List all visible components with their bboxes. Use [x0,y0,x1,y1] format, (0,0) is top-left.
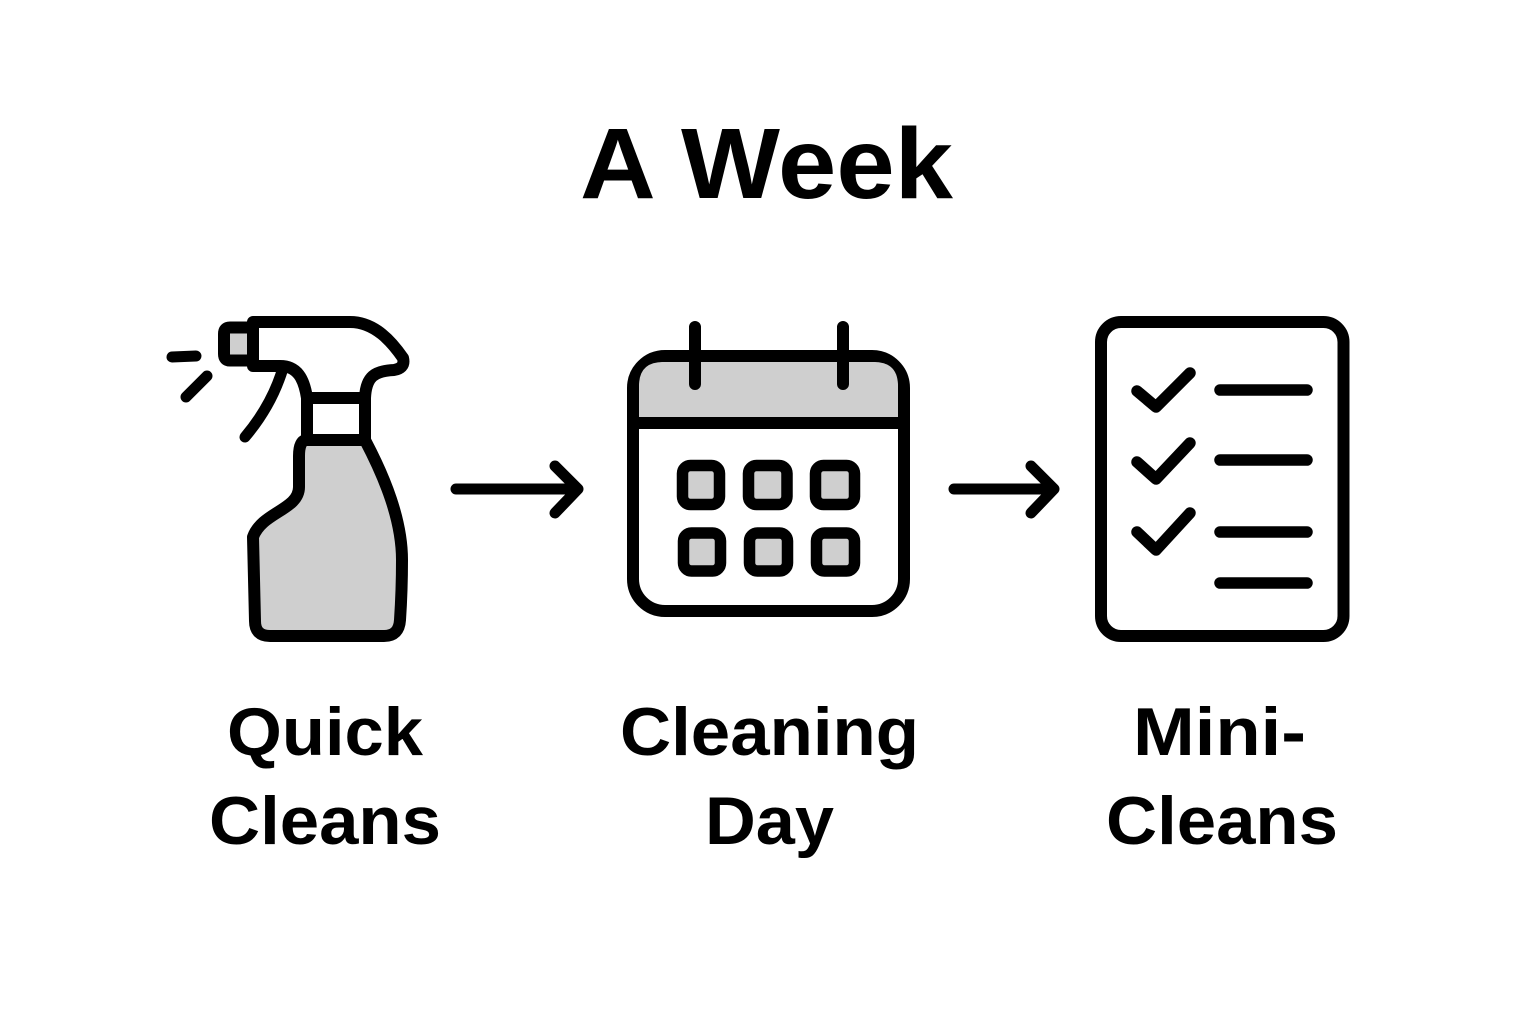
label: Mini-Cleans [1106,694,1338,859]
spray marks [172,356,207,397]
header divider [633,417,904,429]
label: Quick Cleans: Cleans [209,783,441,859]
label: Quick Cleans [209,694,441,859]
arrow: calendar to checklist [954,466,1054,513]
checklist page [1101,322,1344,636]
label: Cleaning Day: Cleaning [620,694,919,770]
arrow: spray to calendar [456,466,578,513]
calendar header band [639,362,898,423]
icon: checklist [1101,322,1344,636]
label: Mini-Cleans: Cleans [1106,783,1338,859]
label: Mini-Cleans: Mini- [1133,694,1306,770]
title: A Week [580,108,953,220]
binder rings [695,327,843,384]
nozzle [224,328,253,360]
calendar frame [633,356,904,611]
label: Cleaning Day: Day [705,783,834,859]
trigger head [253,322,403,398]
icon: calendar [633,327,904,611]
label: Cleaning Day [620,694,919,859]
date squares [682,466,854,571]
icon: spray bottle [172,322,403,636]
trigger lever [245,368,283,437]
check marks [1137,373,1190,550]
label: Quick Cleans: Quick [227,694,423,770]
list lines [1220,390,1307,583]
bottle neck [307,398,365,440]
bottle body [253,440,402,636]
